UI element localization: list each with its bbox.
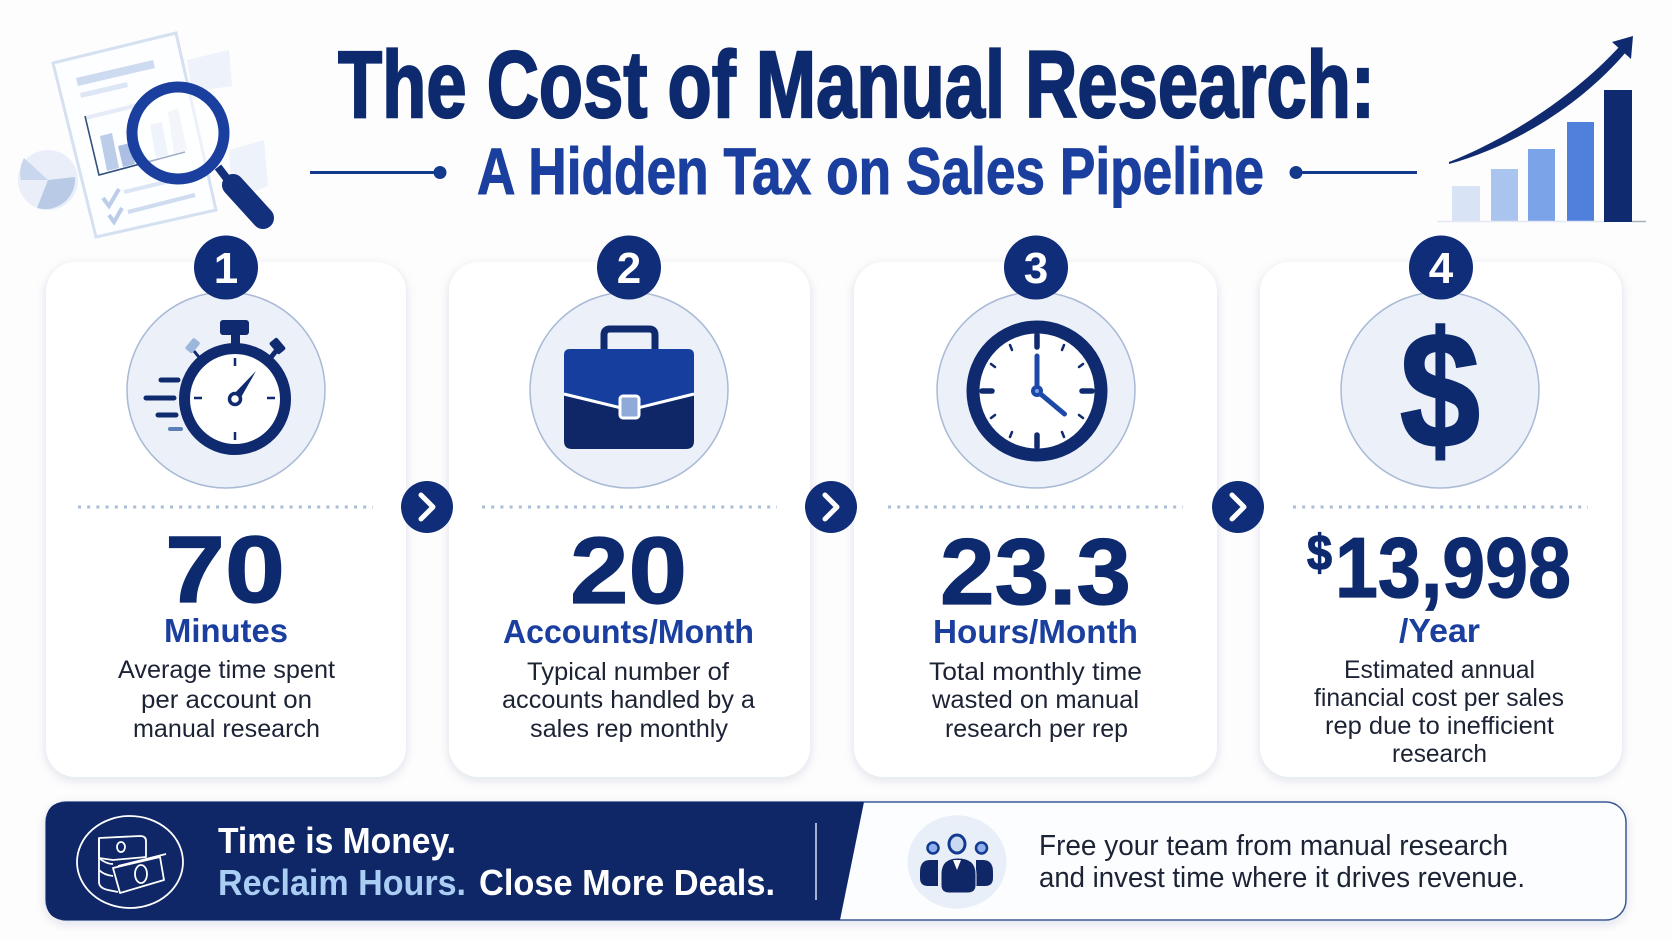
step badge 3 bbox=[1004, 236, 1068, 300]
icon circle bbox=[1341, 292, 1539, 488]
description bbox=[1314, 656, 1564, 768]
stat: 23.3: 23.3 bbox=[940, 519, 1131, 624]
icon: team bbox=[908, 815, 1006, 909]
description bbox=[929, 658, 1142, 743]
slogan: Close More Deals. bbox=[479, 862, 775, 903]
slogan: Reclaim Hours. bbox=[218, 862, 466, 903]
description: Average time spent bbox=[118, 656, 335, 684]
illustration: research document with magnifier bbox=[18, 33, 268, 237]
description: research per rep bbox=[945, 715, 1128, 743]
description: Total monthly time bbox=[929, 658, 1142, 686]
stat: 20: 20 bbox=[570, 518, 687, 624]
slogan bbox=[218, 820, 775, 903]
divider bbox=[78, 506, 373, 508]
arrow: step 3 to 4 bbox=[1212, 481, 1264, 533]
divider bbox=[1293, 506, 1588, 508]
icon circle bbox=[530, 292, 728, 488]
icon: money stacks bbox=[77, 816, 183, 908]
unit: Hours/Month: Hours/Month bbox=[933, 613, 1138, 650]
stat: 70: 70 bbox=[165, 517, 285, 623]
step badge 4 bbox=[1409, 236, 1473, 300]
stat: $13,998: 13,998 bbox=[1335, 521, 1571, 616]
icon circle bbox=[937, 292, 1135, 488]
divider bbox=[482, 506, 777, 508]
description: Typical number of bbox=[527, 658, 729, 686]
panel: card 3 hours per month bbox=[854, 236, 1217, 777]
description: sales rep monthly bbox=[530, 715, 728, 743]
description: accounts handled by a bbox=[502, 686, 755, 714]
icon circle bbox=[127, 292, 325, 488]
step badge 4: 4 bbox=[1429, 244, 1454, 293]
slogan: Time is Money. bbox=[218, 820, 456, 861]
unit: /Year: /Year bbox=[1399, 612, 1480, 649]
panel: card 4 annual cost bbox=[1260, 236, 1622, 777]
description: Estimated annual bbox=[1344, 656, 1535, 684]
supporting message bbox=[1039, 830, 1525, 894]
panel: bottom banner bbox=[46, 802, 1626, 920]
divider bbox=[888, 506, 1183, 508]
icon: clock bbox=[973, 327, 1101, 455]
arrow: step 2 to 3 bbox=[805, 481, 857, 533]
panel: card 2 accounts per month bbox=[449, 236, 810, 777]
description: per account on bbox=[141, 686, 312, 714]
description: wasted on manual bbox=[931, 686, 1139, 714]
panel: dark call to action bbox=[46, 802, 864, 920]
description: manual research bbox=[133, 715, 320, 743]
subtitle with side rules: A Hidden Tax on Sales Pipeline bbox=[477, 134, 1264, 208]
supporting message: Free your team from manual research bbox=[1039, 830, 1508, 862]
icon: dollar sign: $ bbox=[1400, 298, 1480, 482]
step badge 3: 3 bbox=[1024, 244, 1048, 293]
unit: Accounts/Month: Accounts/Month bbox=[503, 613, 754, 650]
arrow: step 1 to 2 bbox=[401, 481, 453, 533]
description: financial cost per sales bbox=[1314, 684, 1564, 712]
title: The Cost of Manual Research: bbox=[338, 32, 1375, 138]
step badge 2: 2 bbox=[617, 244, 641, 293]
panel: card 1 minutes per account bbox=[46, 236, 406, 777]
description: research bbox=[1392, 740, 1487, 768]
step badge 1: 1 bbox=[214, 244, 238, 293]
supporting message: and invest time where it drives revenue. bbox=[1039, 862, 1525, 894]
icon: briefcase bbox=[564, 329, 694, 449]
description: rep due to inefficient bbox=[1325, 712, 1554, 740]
unit: Minutes: Minutes bbox=[164, 612, 288, 649]
step badge 2 bbox=[597, 236, 661, 300]
description bbox=[118, 656, 335, 743]
icon: stopwatch bbox=[146, 320, 286, 450]
step badge 1 bbox=[194, 236, 258, 300]
icon: rising bar chart with arrow bbox=[1437, 36, 1646, 222]
stat: $13,998: $ bbox=[1307, 525, 1332, 581]
description bbox=[502, 658, 755, 743]
